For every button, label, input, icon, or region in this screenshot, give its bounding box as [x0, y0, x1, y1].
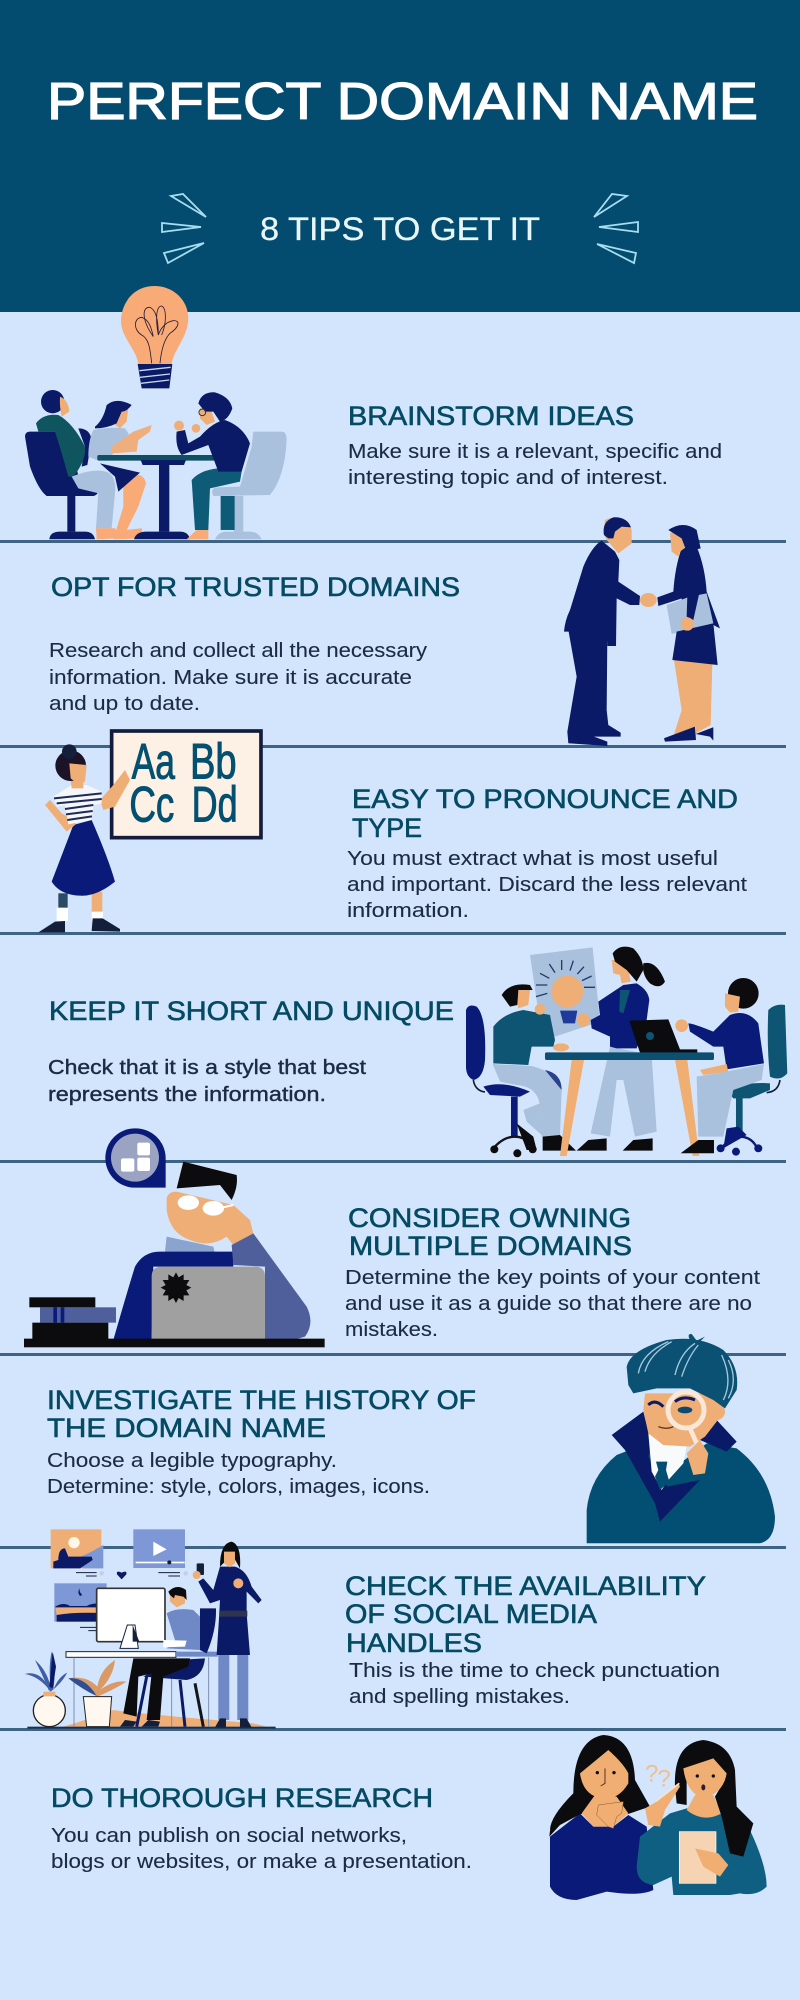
monitor — [97, 1588, 165, 1648]
panel: do thorough research — [51, 1735, 767, 1900]
heading: MULTIPLE DOMAINS — [349, 1231, 632, 1261]
panel: opt for trusted domains — [49, 517, 720, 746]
subtitle: 8 TIPS TO GET IT — [260, 211, 540, 247]
coat — [587, 1443, 775, 1543]
man — [564, 517, 640, 746]
idea poster — [530, 947, 600, 1037]
left chair — [466, 1006, 537, 1157]
collar — [612, 1412, 737, 1522]
text block: Determine: style, colors, images, icons. — [47, 1476, 430, 1498]
icon: social media content team — [25, 1529, 276, 1729]
text block: and important. Discard the less relevant — [347, 874, 747, 896]
plant and vase — [25, 1652, 67, 1727]
video card — [133, 1529, 185, 1568]
icon: left rays — [162, 194, 206, 263]
icon: teacher at alphabet board — [38, 731, 261, 932]
middle woman — [577, 947, 665, 1151]
hat — [627, 1334, 737, 1408]
text block: information. Make sure it is accurate — [49, 667, 412, 689]
question marks: ? — [645, 1761, 658, 1788]
icon: team meeting at desk — [466, 947, 787, 1157]
right woman — [637, 1740, 767, 1895]
laptop — [629, 1019, 697, 1053]
heading: DO THOROUGH RESEARCH — [51, 1783, 433, 1813]
text block: interesting topic and of interest. — [348, 467, 668, 489]
text block: Choose a legible typography. — [47, 1450, 337, 1472]
text block: represents the information. — [48, 1084, 326, 1106]
shirt and tie — [648, 1433, 687, 1490]
icon: light bulb — [121, 286, 188, 388]
laptop — [152, 1267, 265, 1340]
table — [545, 1052, 714, 1156]
panel: consider owning multiple domains — [24, 1128, 760, 1347]
heading: KEEP IT SHORT AND UNIQUE — [49, 996, 454, 1026]
text block: You can publish on social networks, — [51, 1825, 407, 1847]
icon: right rays — [594, 194, 638, 263]
desk — [66, 1652, 218, 1727]
left chair — [25, 432, 98, 496]
middle woman — [88, 401, 152, 539]
right person — [174, 392, 250, 539]
text block — [347, 848, 747, 922]
icon: detective with magnifying glass — [587, 1334, 775, 1543]
alphabet board: Aa — [132, 733, 175, 789]
thought bubble — [105, 1128, 166, 1188]
left person — [493, 984, 576, 1151]
night card — [54, 1583, 107, 1622]
plant and pot — [68, 1660, 127, 1727]
title: PERFECT DOMAIN NAME — [47, 73, 758, 131]
icon: two women thinking — [549, 1735, 767, 1900]
text block — [48, 1057, 367, 1106]
text block: Make sure it is a relevant, specific and — [348, 441, 722, 463]
text block: and spelling mistakes. — [349, 1686, 570, 1708]
panel: keep it short and unique — [48, 947, 787, 1157]
heading — [345, 1571, 706, 1658]
text block: mistakes. — [345, 1319, 438, 1341]
magnifying glass — [668, 1392, 704, 1443]
heading — [47, 1385, 476, 1443]
text block — [349, 1660, 720, 1708]
icon: man at laptop with thought bubble — [24, 1128, 325, 1347]
desk — [24, 1339, 325, 1347]
heading: THE DOMAIN NAME — [47, 1413, 326, 1443]
text block: This is the time to check punctuation — [349, 1660, 720, 1682]
panel: investigate the history — [47, 1334, 775, 1543]
heading: BRAINSTORM IDEAS — [348, 401, 634, 431]
panel: check social media handles — [25, 1529, 720, 1729]
heading — [352, 784, 738, 843]
text block: Research and collect all the necessary — [49, 640, 427, 662]
question marks — [645, 1761, 671, 1793]
left woman — [549, 1735, 653, 1900]
heading — [348, 1203, 632, 1261]
text block: You must extract what is most useful — [347, 848, 718, 870]
teacher — [38, 744, 130, 932]
alphabet board: Bb — [190, 733, 237, 789]
ground — [27, 1710, 276, 1729]
face — [643, 1393, 725, 1447]
text block — [348, 441, 722, 489]
text block — [345, 1267, 760, 1341]
heading: INVESTIGATE THE HISTORY OF — [47, 1385, 476, 1415]
right chair — [212, 432, 287, 496]
text block — [51, 1825, 472, 1873]
notepad — [679, 1832, 716, 1883]
heading: OF SOCIAL MEDIA — [345, 1599, 597, 1629]
right person — [675, 978, 764, 1153]
text block: Check that it is a style that best — [48, 1057, 367, 1079]
standing woman — [193, 1542, 262, 1727]
text block: and up to date. — [49, 693, 200, 715]
seated man — [120, 1587, 216, 1727]
left person — [36, 390, 120, 539]
question marks: ? — [657, 1766, 671, 1793]
panel: easy to pronounce and type — [38, 731, 747, 932]
alphabet board — [112, 731, 261, 838]
man — [113, 1162, 310, 1340]
text block: information. — [347, 900, 469, 922]
heading: CHECK THE AVAILABILITY — [345, 1571, 706, 1601]
icon: business handshake — [564, 517, 720, 746]
books — [29, 1297, 116, 1339]
hand — [687, 1440, 708, 1475]
right chair — [717, 1005, 787, 1156]
heading: EASY TO PRONOUNCE AND — [352, 784, 738, 814]
text block: blogs or websites, or make a presentation. — [51, 1851, 472, 1873]
header band — [0, 0, 800, 312]
alphabet board: Dd — [192, 777, 238, 833]
text block: and use it as a guide so that there are no — [345, 1293, 752, 1315]
heading: OPT FOR TRUSTED DOMAINS — [51, 572, 460, 602]
text block: Determine the key points of your content — [345, 1267, 760, 1289]
heading: HANDLES — [346, 1628, 482, 1658]
icon: heart and ticks — [76, 1571, 188, 1631]
panel: brainstorm ideas — [25, 286, 722, 539]
alphabet board: Cc — [129, 777, 174, 833]
icon: team around table under light bulb — [25, 286, 287, 539]
hand with pencil — [645, 1783, 680, 1827]
image card — [51, 1529, 103, 1568]
text block — [47, 1450, 430, 1498]
hand on notepad — [695, 1848, 728, 1877]
table — [97, 455, 217, 539]
heading: CONSIDER OWNING — [348, 1203, 631, 1233]
woman — [657, 525, 720, 742]
heading: TYPE — [352, 813, 422, 843]
text block — [49, 640, 427, 715]
